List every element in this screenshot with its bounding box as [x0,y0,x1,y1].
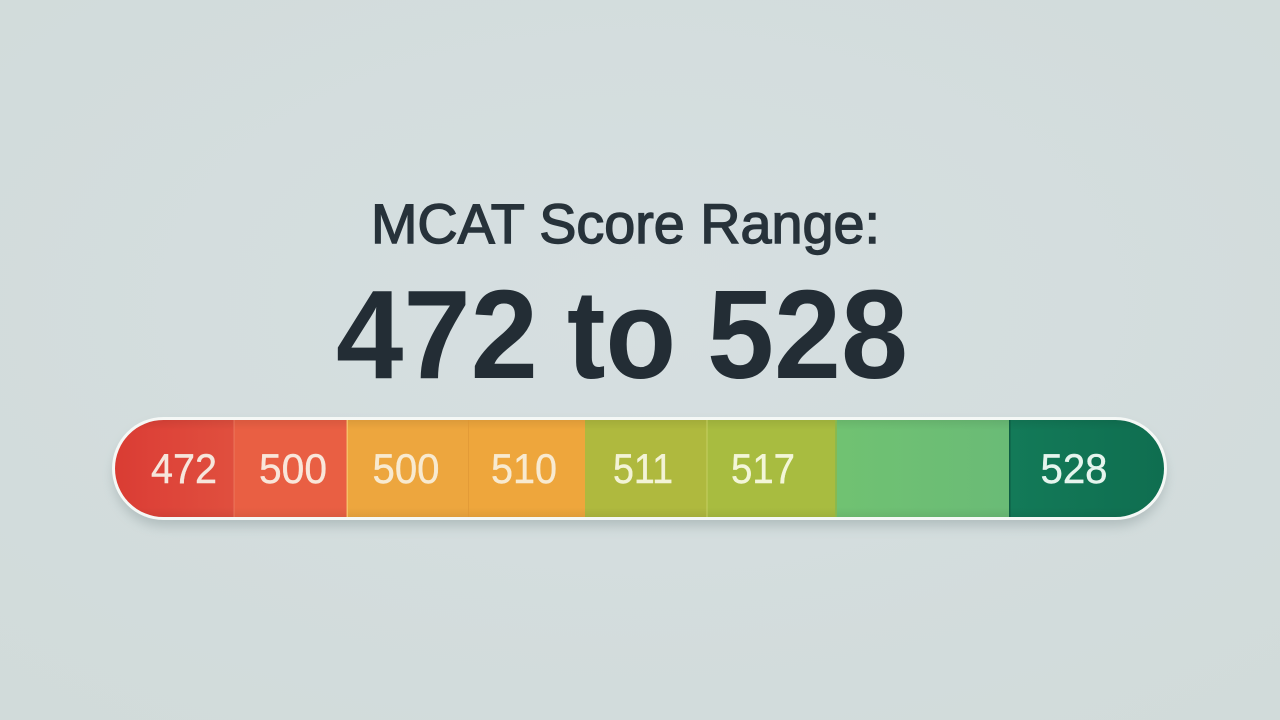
segment: unlabeled green [836,420,1010,517]
segment: 528 [1010,420,1164,517]
segment: 472 [115,420,234,517]
label: 500: 500 [372,445,440,492]
label: 510: 510 [491,445,557,492]
label: 528: 528 [1040,445,1108,492]
segment: 500 orange [347,420,468,517]
label: 511: 511 [613,445,673,492]
label: 517: 517 [731,445,795,492]
segment: 511 [585,420,707,517]
segment: 510 [468,420,585,517]
segment: 517 [707,420,836,517]
title: MCAT Score Range: MCAT Score Range: [371,192,880,255]
label: 472: 472 [151,445,217,492]
heading: score range 472 to 528: 528 [707,264,908,405]
segment: 500 red [234,420,347,517]
heading: score range 472 to 528: 472 [336,264,538,405]
heading: score range 472 to 528 [336,264,908,405]
score scale bar [112,417,1167,526]
heading: score range 472 to 528: to [567,264,676,405]
label: 500: 500 [259,445,327,492]
